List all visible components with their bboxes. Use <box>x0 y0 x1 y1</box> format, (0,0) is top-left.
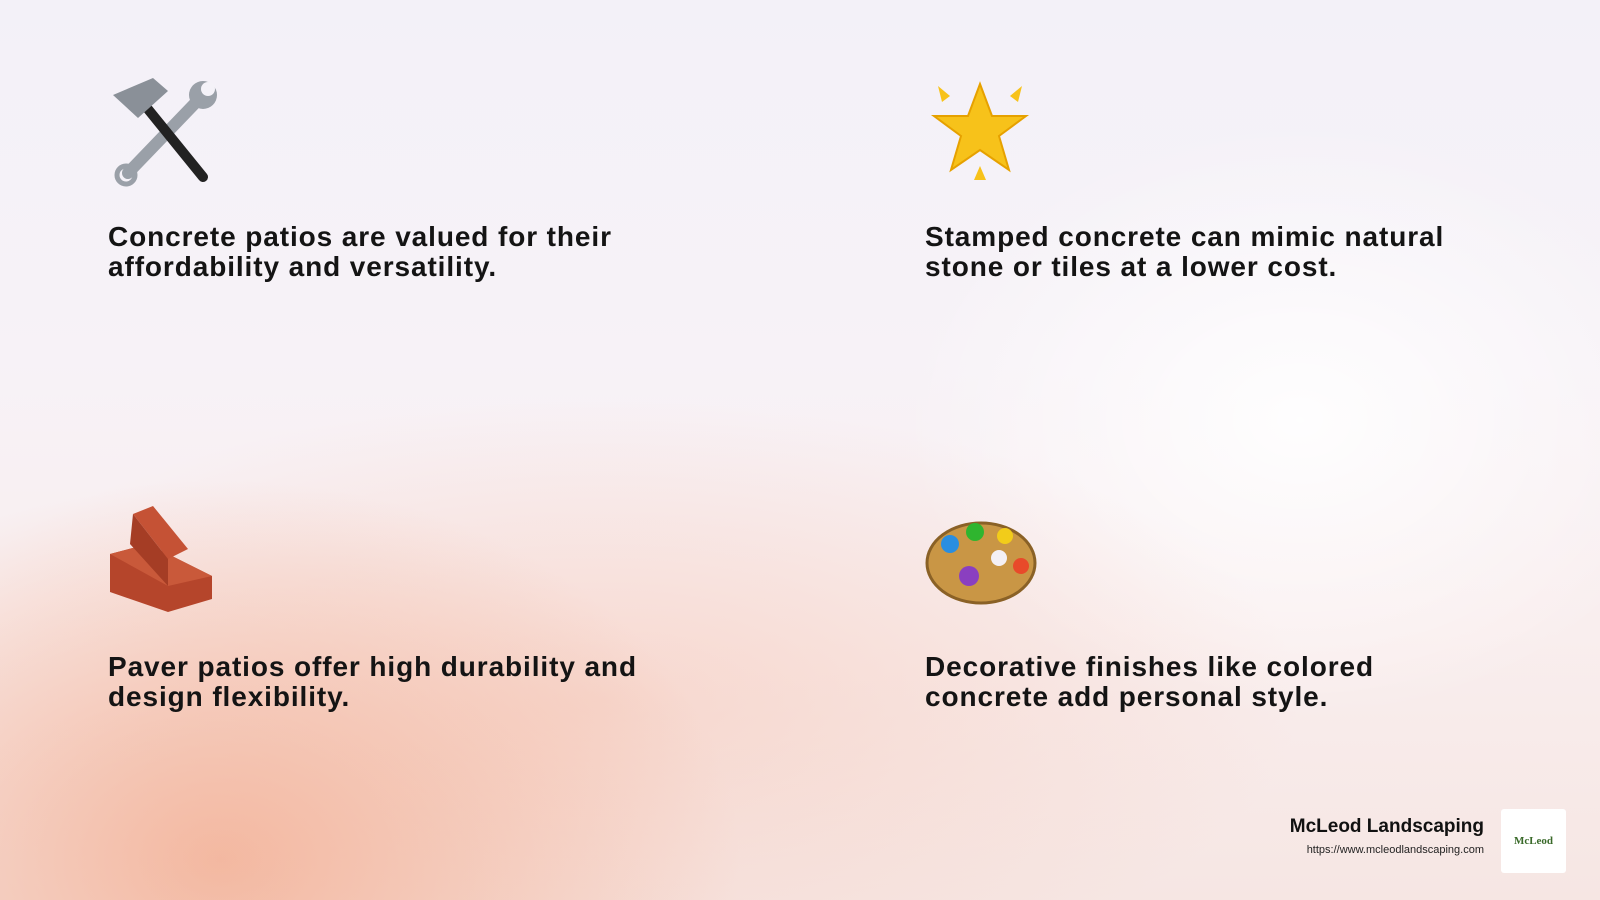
text: decorative finishes: Decorative finishes like colored <box>925 651 1374 682</box>
icon: hammer and wrench <box>113 78 217 186</box>
text: stamped concrete: stone or tiles at a lower cost. <box>925 251 1337 282</box>
text: paver patios: design flexibility. <box>108 681 350 712</box>
logo: McLeod <box>1514 835 1553 847</box>
text: concrete patios: affordability and versatility. <box>108 251 497 282</box>
text: decorative finishes <box>925 651 1374 712</box>
text: stamped concrete <box>925 221 1444 282</box>
brand block: https://www.mcleodlandscaping.com <box>1307 844 1484 856</box>
text: concrete patios <box>108 221 612 282</box>
text: concrete patios: Concrete patios are valued for their <box>108 221 612 252</box>
text: paver patios <box>108 651 637 712</box>
brand block: McLeod Landscaping <box>1290 816 1484 837</box>
icon: brick <box>110 506 212 612</box>
icon: glowing star <box>931 81 1029 180</box>
logo <box>1501 809 1566 873</box>
text: decorative finishes: concrete add personal style. <box>925 681 1328 712</box>
text: paver patios: Paver patios offer high durability and <box>108 651 637 682</box>
icon: palette <box>926 522 1036 604</box>
brand block <box>1290 816 1484 856</box>
text: stamped concrete: Stamped concrete can mimic natural <box>925 221 1444 252</box>
